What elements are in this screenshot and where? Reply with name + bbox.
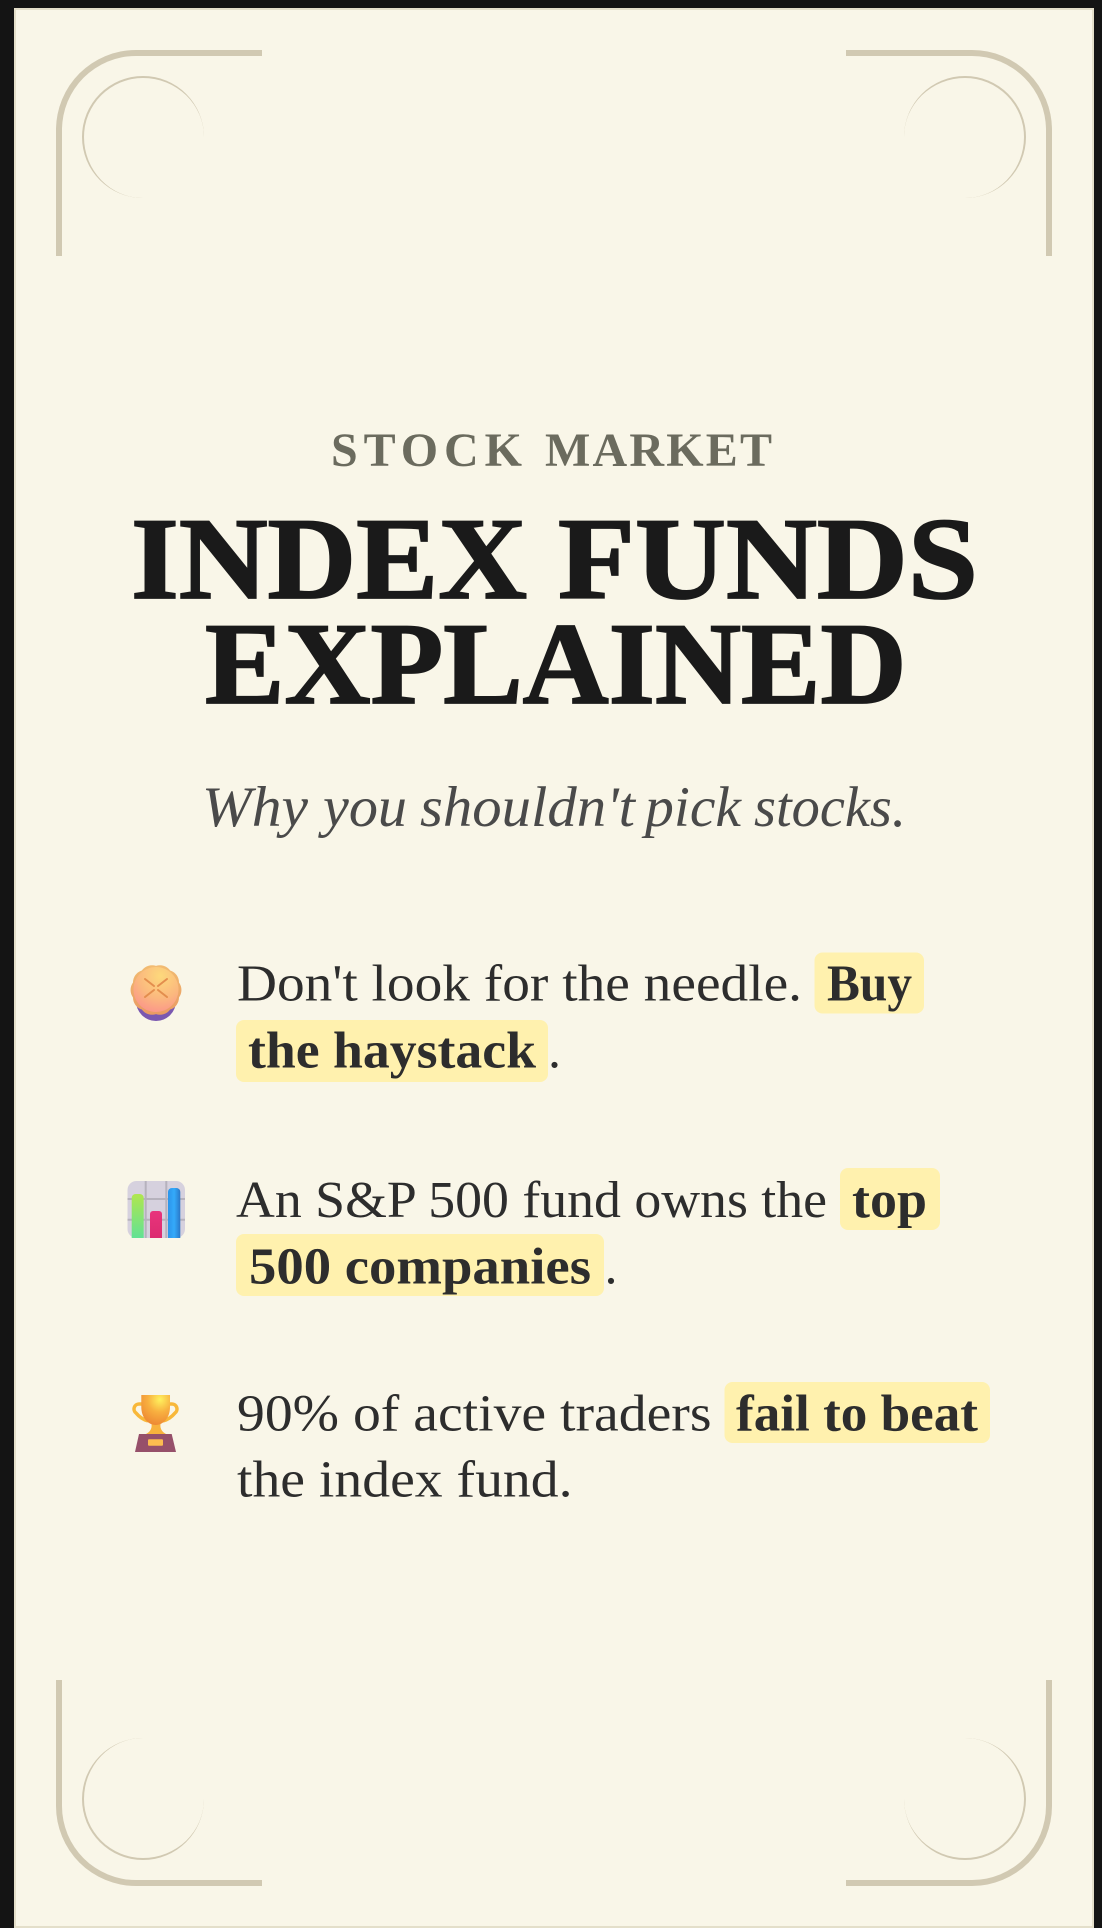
corner ornament: bottom right [846, 1680, 1052, 1886]
text: line 2: the index fund. [237, 1452, 572, 1508]
text: period: . [604, 1238, 618, 1296]
text: line 1: Don't look for the needle. [237, 956, 802, 1012]
subtitle: Why [202, 776, 309, 839]
title: INDEX [131, 495, 527, 624]
title: FUNDS [558, 495, 978, 624]
subtitle: pick [641, 776, 743, 839]
list item 1 [131, 952, 924, 1082]
highlight: top [840, 1168, 940, 1230]
highlight: top: top [852, 1172, 927, 1229]
subtitle: you [318, 776, 407, 839]
title [131, 495, 978, 729]
subtitle [202, 776, 906, 839]
highlight: 500 companies: 500 companies [249, 1238, 591, 1296]
highlight: fail to beat: fail to beat [736, 1386, 979, 1442]
text: period: . [548, 1022, 561, 1080]
corner ornament: top right [846, 50, 1052, 256]
highlight: buy: Buy [827, 956, 912, 1012]
icon: trophy [134, 1395, 177, 1452]
eyebrow: stock market [331, 424, 772, 477]
eyebrow: stock market: STOCK [331, 424, 522, 477]
corner ornament: bottom left [56, 1680, 262, 1886]
subtitle: shouldn't [420, 776, 636, 839]
subtitle: stocks. [754, 776, 906, 839]
text: line 1: 90% of active traders [237, 1386, 712, 1442]
icon: bar chart [128, 1181, 185, 1238]
icon: pie [131, 965, 181, 1021]
eyebrow: stock market: MARKET [545, 424, 772, 477]
text: line 1: An S&P 500 fund owns the [236, 1172, 827, 1229]
title: EXPLAINED [205, 600, 906, 729]
list item 3 [134, 1382, 990, 1508]
highlight: the haystack: the haystack [248, 1022, 536, 1080]
list item 2 [128, 1168, 940, 1296]
corner ornament: top left [56, 50, 262, 256]
